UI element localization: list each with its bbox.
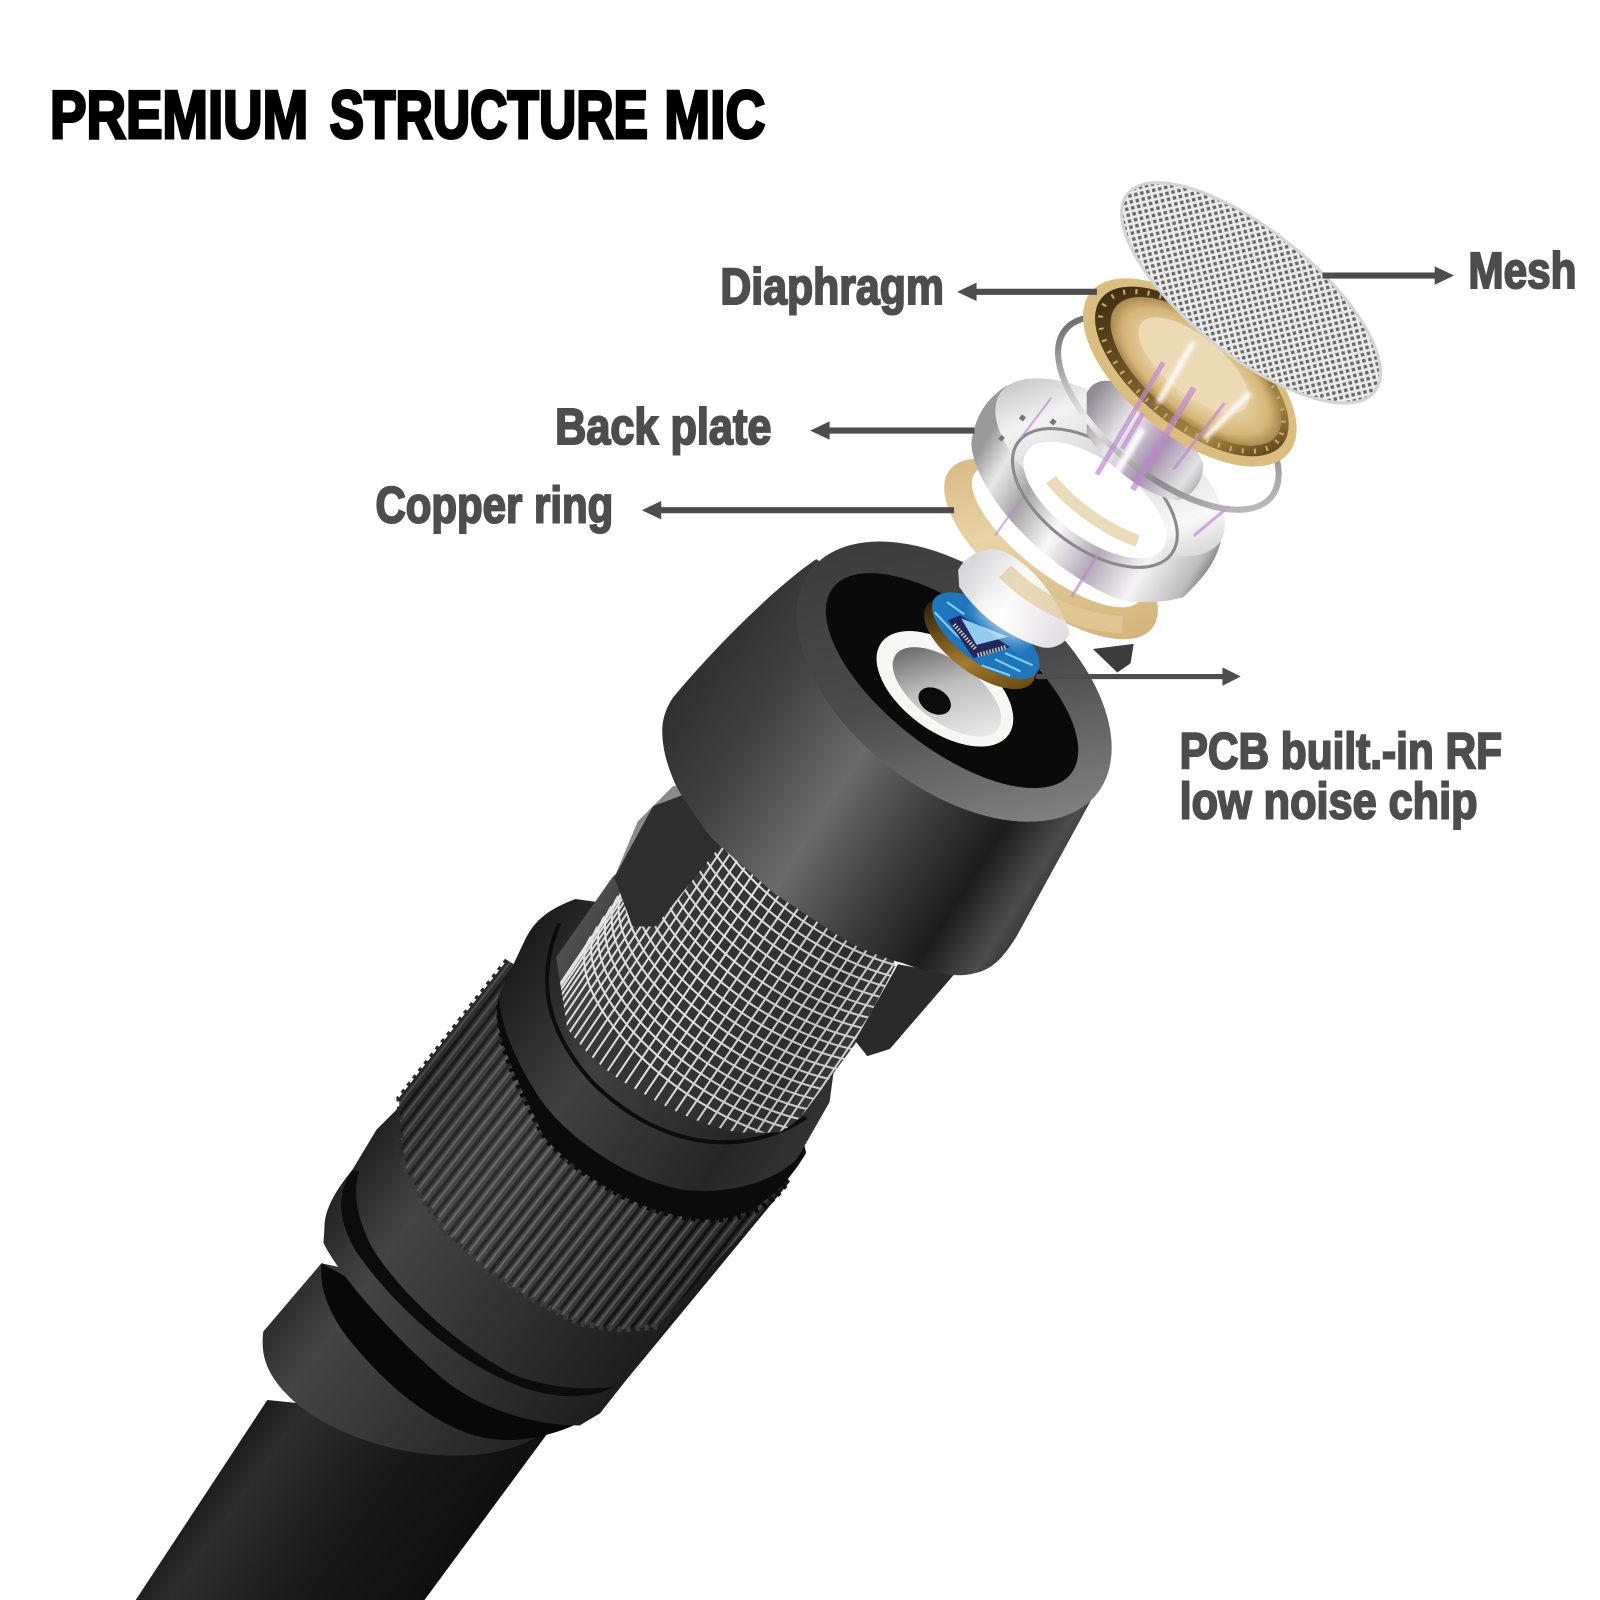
title: MIC [664, 78, 765, 153]
cable [136, 1400, 551, 1600]
label: PCB chip: PCB built.-in RF [1180, 722, 1502, 779]
title [50, 78, 765, 153]
label: mesh: Mesh [1468, 242, 1577, 299]
knurled barrel [399, 960, 790, 1330]
label: PCB chip [1180, 722, 1502, 829]
white spacer cylinder [958, 549, 1069, 651]
arrow: PCB chip [1036, 667, 1241, 686]
arrow: mesh [1322, 266, 1454, 285]
title: PREMIUM [50, 78, 308, 153]
head opening [791, 534, 1113, 827]
PCB chip board [909, 576, 1053, 706]
arrow: copper ring [642, 501, 954, 519]
metal mesh grille [556, 844, 895, 1133]
arrow: back plate [810, 421, 974, 440]
copper ring [916, 426, 1186, 672]
white light flares [1112, 342, 1250, 480]
right tab [855, 964, 954, 1056]
label: diaphragm: Diaphragm [720, 258, 944, 315]
neck [263, 1263, 612, 1456]
label: back plate: Back plate [555, 398, 771, 455]
arrow: diaphragm [957, 283, 1097, 301]
black band [497, 995, 806, 1220]
label: PCB chip: low noise chip [1180, 772, 1478, 829]
purple light streaks [995, 362, 1224, 597]
upper body and flange [323, 960, 790, 1426]
back plate [967, 344, 1253, 602]
small dark wedge [1093, 644, 1134, 672]
chrome cup [1087, 381, 1203, 500]
exploded capsule parts [909, 144, 1415, 706]
silver wire ring [1026, 281, 1311, 545]
left tab [614, 791, 719, 927]
left tab highlight [614, 786, 694, 878]
black lower groove [321, 1263, 602, 1440]
collar groove [547, 923, 806, 1142]
diaphragm [1051, 243, 1329, 502]
cone centre hole [914, 682, 956, 720]
copper ring front band [1005, 571, 1122, 624]
inner cone [878, 630, 1016, 754]
microphone body illustration [136, 485, 1163, 1600]
inner cone ring [856, 608, 1034, 770]
title: STRUCTURE [330, 78, 648, 153]
label: copper ring: Copper ring [376, 476, 613, 533]
head body [662, 559, 1108, 975]
black upper groove [341, 1170, 616, 1396]
collar ring [499, 899, 834, 1191]
mesh disc [1087, 144, 1415, 442]
head rim [745, 485, 1163, 878]
